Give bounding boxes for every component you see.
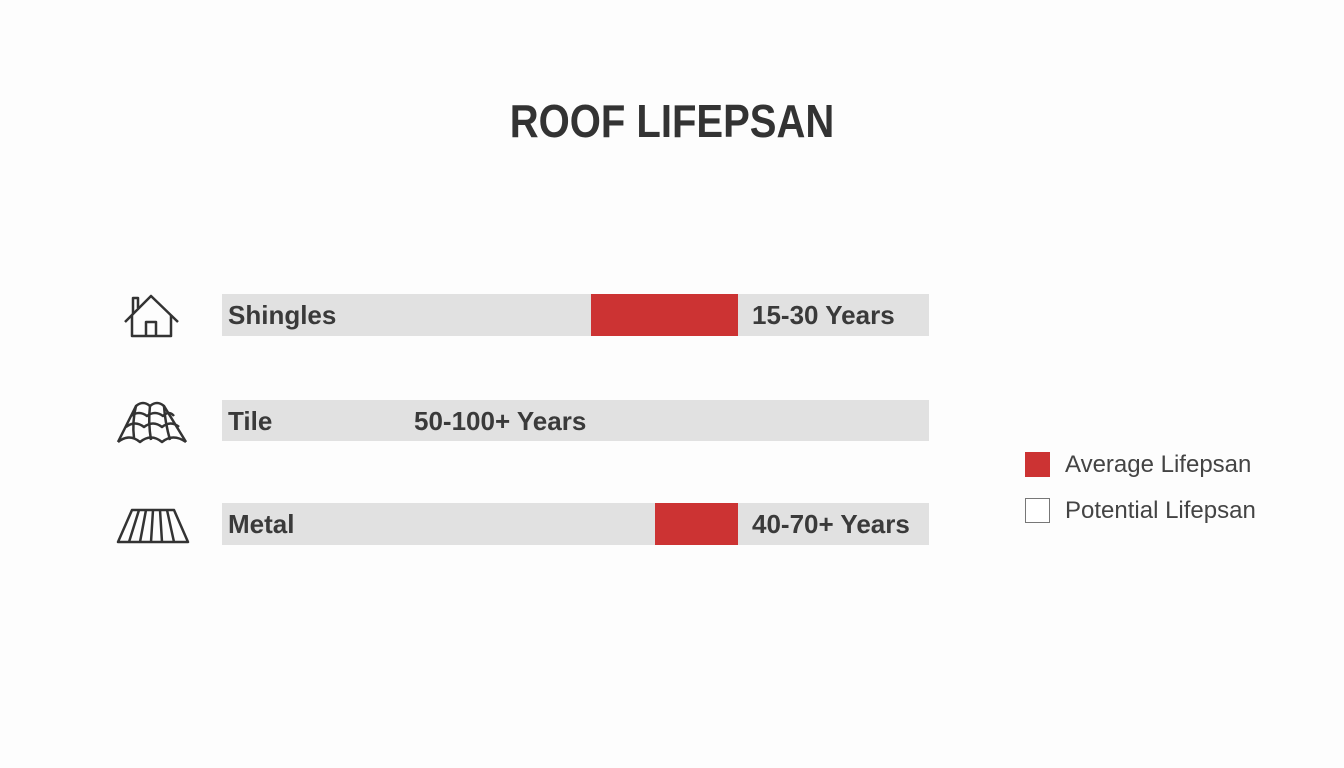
legend: average: Average Lifepsan [1065,451,1251,478]
value tile: 50-100+ Years [414,406,586,436]
average segment metal [655,503,738,545]
label shingles: Shingles [228,300,336,330]
icon: house [124,294,179,338]
bar: tile [222,400,929,441]
icon: metal roof [116,508,190,544]
bar: metal [222,503,929,545]
average segment shingles [591,294,738,336]
value metal: 40-70+ Years [752,509,910,539]
bar: shingles [222,294,929,336]
label tile: Tile [228,406,272,436]
icon: tile roof [116,402,187,444]
value shingles: 15-30 Years [752,300,895,330]
label metal: Metal [228,509,294,539]
title: ROOF LIFEPSAN [510,95,834,147]
legend [1025,451,1256,524]
legend: potential: Potential Lifepsan [1065,497,1256,524]
